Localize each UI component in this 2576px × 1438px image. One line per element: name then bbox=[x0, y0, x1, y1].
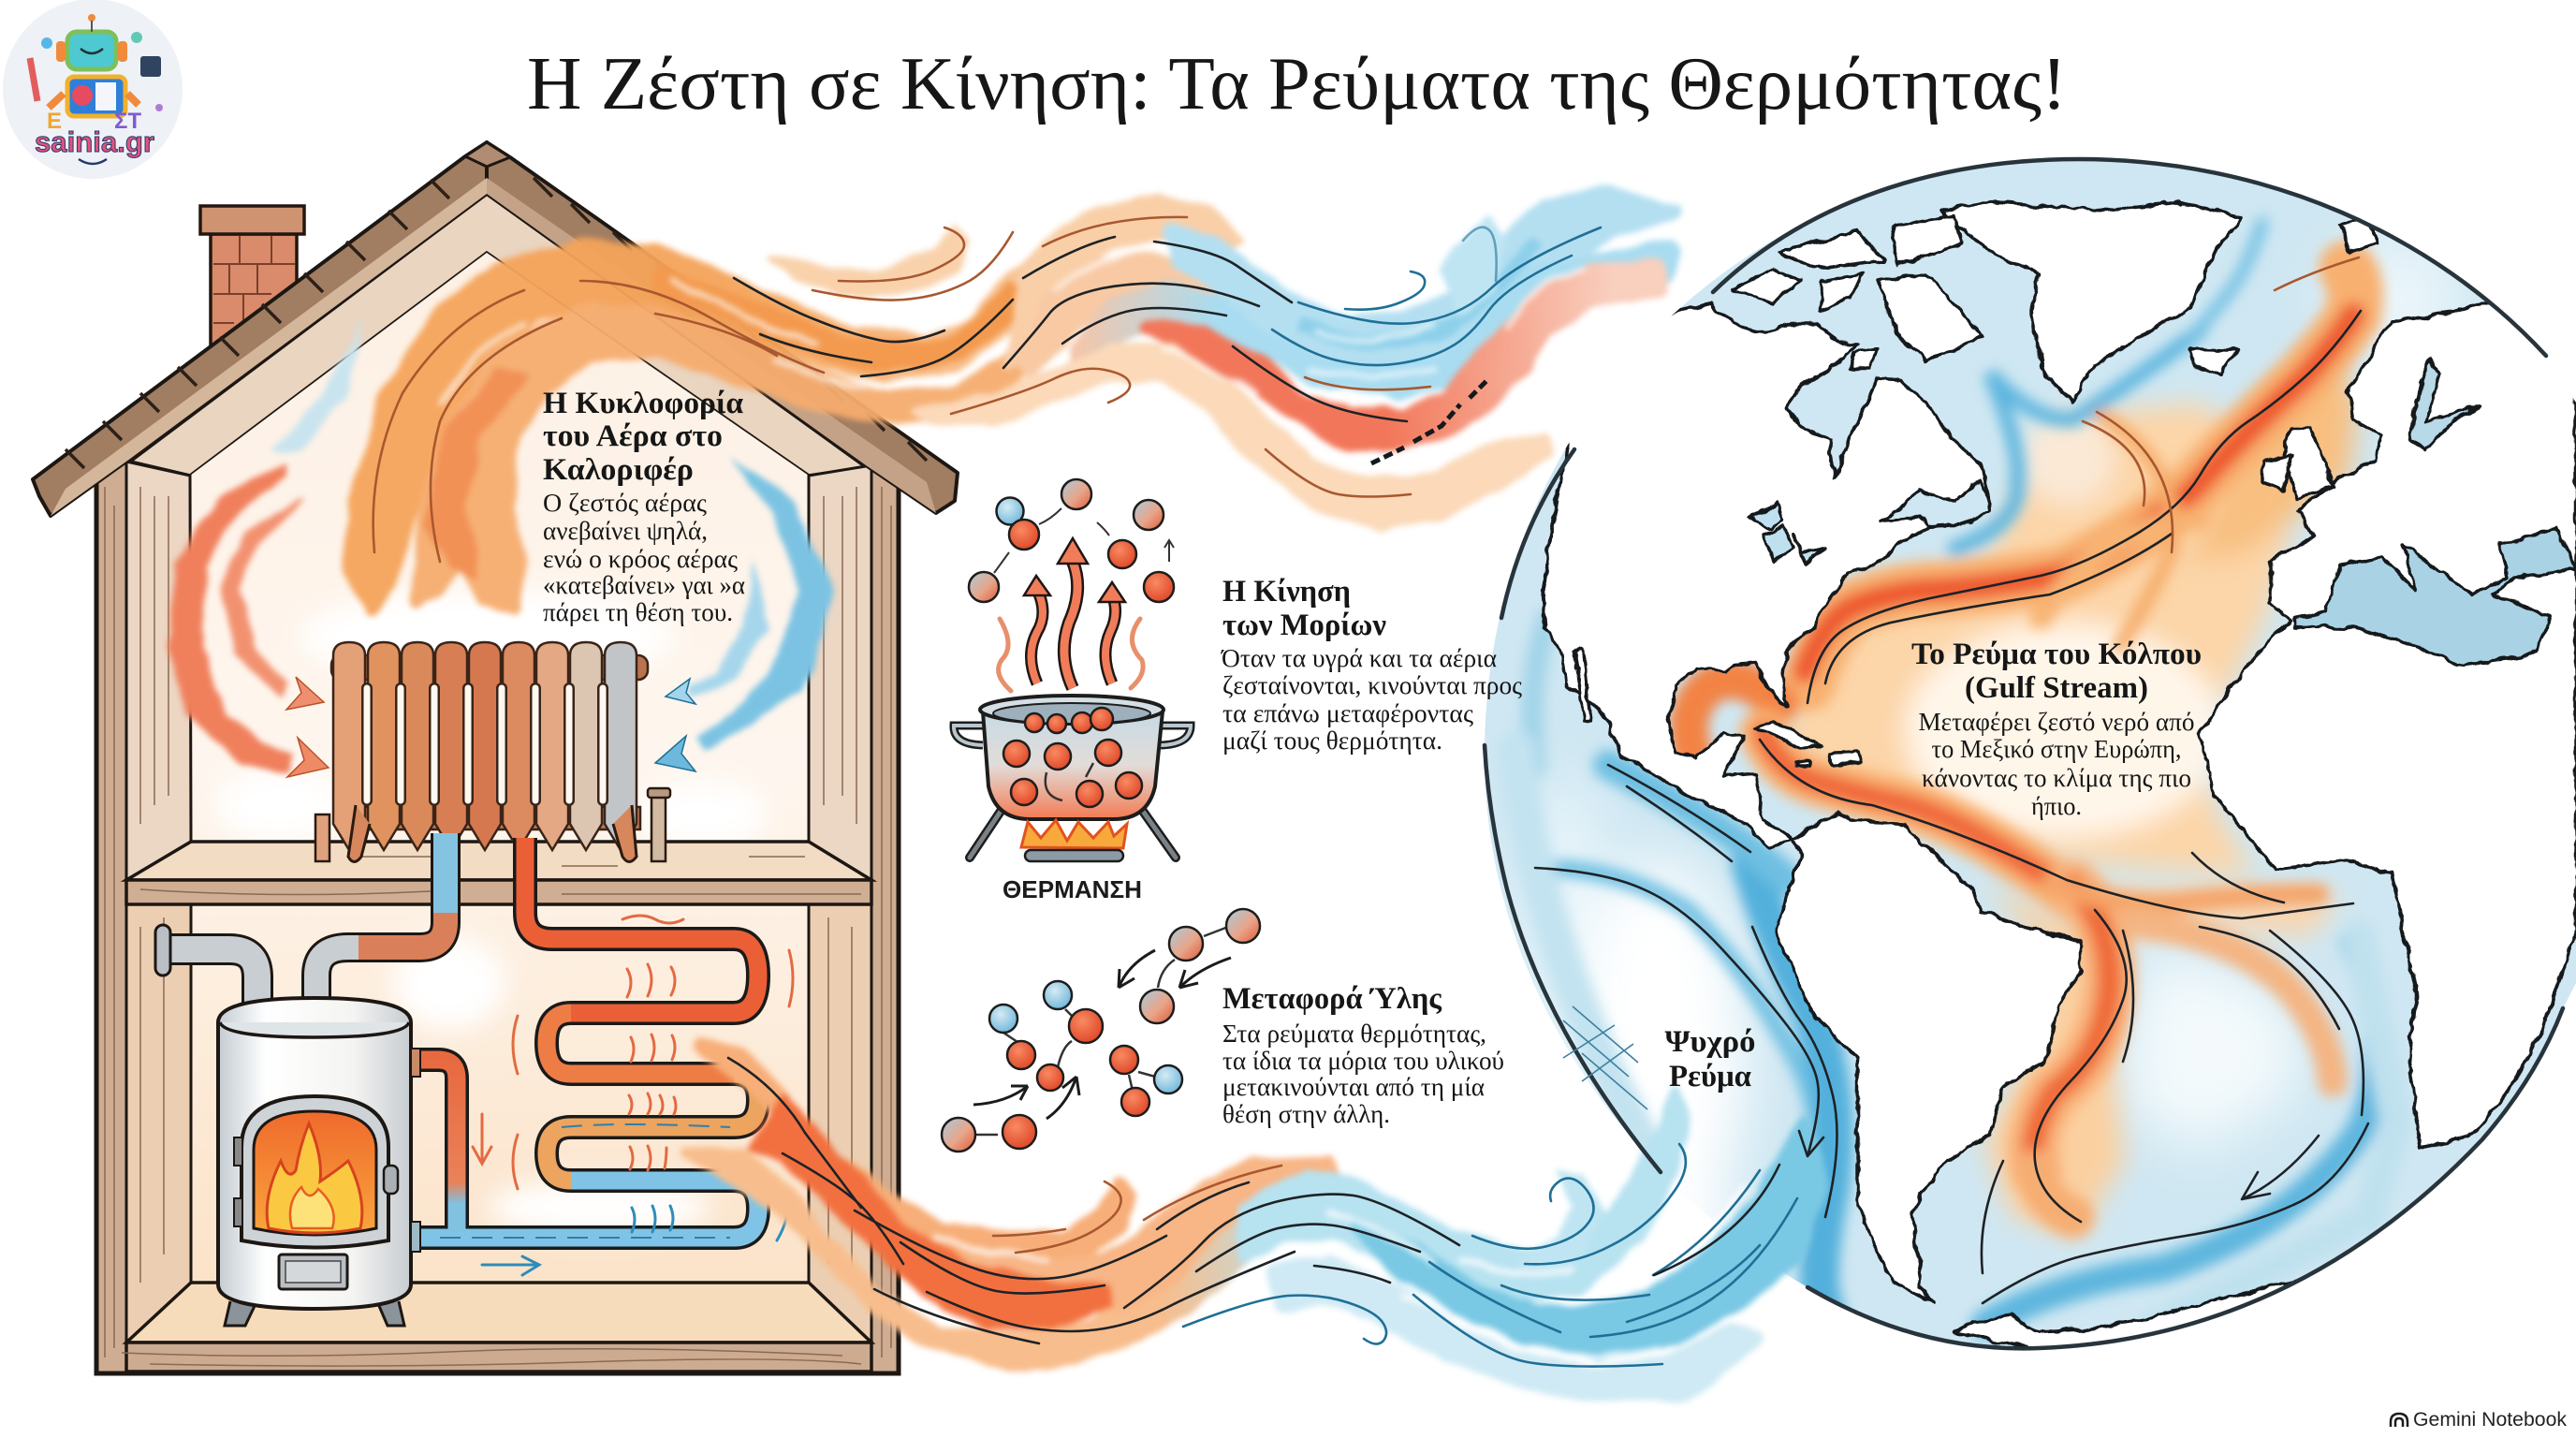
text: air circulation in radiator bbox=[543, 387, 745, 626]
text: air circulation in radiator: Η Κυκλοφορία bbox=[543, 387, 744, 420]
pale lower band bbox=[918, 346, 1549, 524]
bottom stream blue ink bbox=[1183, 1144, 1797, 1367]
text: cold current bbox=[1664, 1025, 1756, 1093]
text: mass transfer: μετακινούνται από τη μία bbox=[1222, 1073, 1485, 1101]
North America bbox=[1541, 301, 1992, 850]
feather streaks bbox=[440, 248, 1582, 403]
ink flow lines bbox=[373, 217, 2368, 1367]
chimney bbox=[200, 206, 304, 348]
text: gulf stream: το Μεξικό στην Ευρώπη, bbox=[1932, 735, 2181, 763]
firebox door bbox=[242, 1096, 388, 1247]
top stream blue ink bbox=[1272, 227, 1601, 365]
top curl bbox=[773, 229, 969, 292]
text: gulf stream bbox=[1911, 638, 2202, 820]
cold atlantic bands bbox=[1954, 331, 2200, 549]
indoor swirl ink bbox=[373, 281, 824, 562]
text: gulf stream: (Gulf Stream) bbox=[1965, 671, 2148, 705]
Baja California bbox=[1573, 651, 1591, 721]
flame window bbox=[254, 1111, 376, 1235]
text: molecule motion bbox=[1221, 575, 1522, 755]
copper return pipe bbox=[359, 833, 446, 947]
text: air circulation in radiator: «κατεβαίνει» γαι »α bbox=[543, 571, 745, 599]
pacific hatch bbox=[1563, 1006, 1647, 1109]
text: air circulation in radiator: ανεβαίνει ψηλά, bbox=[543, 517, 708, 545]
gulf stream bands bbox=[1808, 269, 2355, 683]
back wall bbox=[190, 253, 809, 1283]
Antarctica bbox=[1954, 1275, 2319, 1350]
top stream ink bbox=[734, 237, 1407, 421]
pacific ink bbox=[1535, 765, 1837, 1275]
top stream warm ink bbox=[812, 217, 1430, 496]
land masses bbox=[1450, 201, 2576, 1350]
text: mass transfer: θέση στην άλλη. bbox=[1222, 1100, 1390, 1128]
warm red band bbox=[1148, 267, 1661, 448]
radiator bbox=[315, 642, 670, 861]
text: molecule motion: ζεσταίνονται, κινούνται προς bbox=[1222, 671, 1522, 699]
burner flame bbox=[1021, 820, 1127, 861]
text: gulf stream: ήπιο. bbox=[2031, 792, 2082, 820]
text: air circulation in radiator: Καλοριφέρ bbox=[543, 453, 694, 487]
icon: boiling pot with rising molecules bbox=[954, 479, 1191, 861]
gable face bbox=[130, 194, 866, 476]
Arctic islands bbox=[1731, 214, 2378, 369]
rising heat arrows bbox=[999, 538, 1143, 691]
text: mass transfer bbox=[1222, 982, 1504, 1128]
Great Lakes bbox=[1750, 503, 1825, 564]
globe outline bbox=[1485, 159, 2563, 1348]
warm-to-cold stream from boiler to Pacific bbox=[686, 1046, 1821, 1395]
walls bbox=[96, 462, 899, 1373]
pot bbox=[954, 696, 1191, 858]
South America bbox=[1777, 812, 2081, 1301]
hot supply pipe bbox=[412, 1060, 457, 1226]
indoor side arrows bbox=[167, 318, 835, 775]
Greenland bbox=[1940, 201, 2242, 403]
Caribbean islands bbox=[1755, 722, 1861, 766]
text: molecule motion: τα επάνω μεταφέροντας bbox=[1222, 699, 1473, 727]
text: gulf stream: Το Ρεύμα του Κόλπου bbox=[1911, 638, 2202, 671]
text: molecule motion: Όταν τα υγρά και τα αέρια bbox=[1221, 644, 1497, 672]
atlantic warm ink bbox=[2083, 257, 2359, 552]
warm air stream from house to Pacific bbox=[167, 192, 1676, 775]
logo: sainia.gr robot badge: Ε bbox=[47, 109, 62, 134]
panel: globe ocean washes bbox=[1479, 150, 2576, 1367]
label: heating: ΘΕΡΜΑΝΣΗ bbox=[1003, 875, 1142, 903]
house illustration bbox=[33, 142, 958, 1373]
text: molecule motion: μαζί τους θερμότητα. bbox=[1222, 726, 1442, 755]
text: molecule motion: Η Κίνηση bbox=[1222, 575, 1351, 609]
logo: sainia.gr robot badge: sainia.gr bbox=[35, 125, 154, 158]
title: Η Ζέστη σε Κίνηση: Τα Ρεύματα της Θερμότητας! bbox=[527, 43, 2067, 125]
Iceland bbox=[2189, 348, 2238, 374]
boiler tank bbox=[218, 998, 420, 1326]
text: cold current: Ψυχρό bbox=[1664, 1025, 1756, 1059]
indoor warm rising air and orange bands bbox=[348, 198, 1236, 609]
indoor arrow heads bbox=[286, 677, 695, 777]
text: air circulation in radiator: Ο ζεστός αέρας bbox=[543, 489, 707, 517]
text: air circulation in radiator: ενώ ο κρόος αέρας bbox=[543, 545, 738, 573]
Europe and Africa bbox=[2200, 281, 2576, 1148]
white glow around radiator bbox=[215, 590, 768, 1236]
serpentine heating pipe bbox=[421, 838, 758, 1238]
text: gulf stream: Μεταφέρει ζεστό νερό από bbox=[1919, 708, 2194, 736]
lower floor bbox=[122, 1283, 871, 1372]
logo: sainia.gr robot badge: ΣΤ bbox=[114, 109, 141, 134]
heat squiggles and flow arrows bbox=[473, 916, 793, 1275]
text: cold current: Ρεύμα bbox=[1669, 1060, 1752, 1093]
upper floor bbox=[126, 842, 871, 904]
text: air circulation in radiator: του Αέρα στο bbox=[543, 419, 723, 453]
bottom stream warm ink bbox=[993, 1166, 1281, 1253]
atlantic ink bbox=[1760, 311, 2368, 1303]
pacific cold bands bbox=[1535, 868, 1816, 1144]
grey boiler pipes bbox=[155, 925, 359, 1009]
text: mass transfer: Μεταφορά Ύλης bbox=[1222, 982, 1442, 1016]
British Isles bbox=[2262, 428, 2333, 499]
logo: sainia.gr robot badge bbox=[3, 0, 183, 179]
text: mass transfer: τα ίδια τα μόρια του υλικού bbox=[1222, 1047, 1504, 1075]
side panels bbox=[105, 462, 891, 1357]
Mediterranean bbox=[2294, 528, 2576, 666]
free molecules bbox=[969, 479, 1174, 602]
text: air circulation in radiator: πάρει τη θέση του. bbox=[543, 598, 733, 626]
Alaska peninsula bbox=[1371, 379, 1488, 463]
Gulf of St Lawrence bbox=[1881, 479, 1991, 526]
text: mass transfer: Στα ρεύματα θερμότητας, bbox=[1222, 1020, 1486, 1048]
Baltic bbox=[2409, 357, 2480, 449]
bottom stream ink bbox=[728, 1058, 1459, 1343]
roof bbox=[33, 142, 958, 516]
cool blue bands bbox=[1076, 192, 1676, 393]
text: gulf stream: κάνοντας το κλίμα της πιο bbox=[1922, 764, 2191, 792]
text: molecule motion: των Μορίων bbox=[1222, 609, 1386, 642]
watermark: Gemini Notebook: Gemini Notebook bbox=[2413, 1409, 2568, 1431]
icon: moving molecules bbox=[942, 909, 1260, 1152]
